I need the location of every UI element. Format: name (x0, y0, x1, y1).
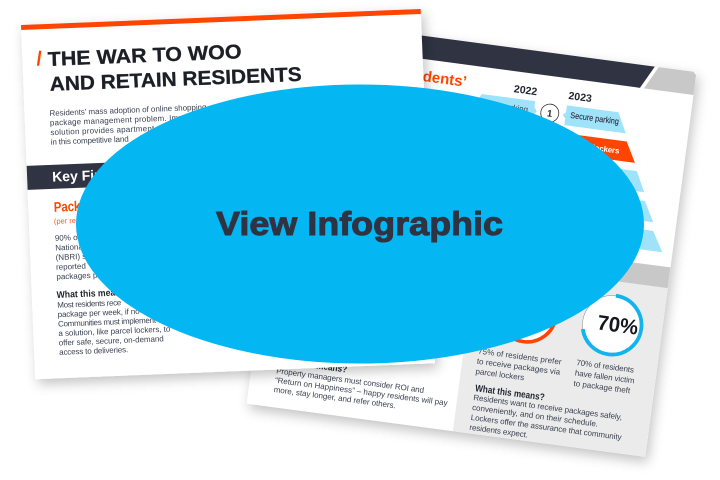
heading: residents: Residents’ (390, 64, 468, 91)
what this means: left: What this means? (277, 355, 348, 376)
package findings text (55, 232, 107, 281)
title slash: / (36, 48, 43, 70)
stat caption: 75%: 75% of residents prefer (478, 347, 562, 367)
row 1, 2022 label: Secure parking (474, 98, 529, 114)
stat caption: 70% (573, 358, 637, 396)
explanation: left: more, stay longer, and refer others. (273, 385, 396, 410)
title: THE WAR TO WOO (47, 41, 242, 71)
rank 1 badge (540, 103, 560, 123)
explanation: right (469, 393, 625, 452)
what this means: right: What this means? (474, 383, 545, 403)
stat caption: 75%: parcel lockers (475, 367, 525, 382)
ranking chart (454, 93, 680, 252)
intro text: package management problem. Imp (50, 113, 184, 128)
explanation: left: Property managers must consider ROI and (276, 366, 425, 395)
what this means: What this means? (56, 287, 131, 301)
stat caption: 75%: to receive packages via (476, 357, 561, 377)
explanation: right: conveniently, and on their schedule. (472, 403, 599, 429)
intro text: in this competitive land (51, 135, 129, 147)
rank 1 badge: 1 (546, 108, 554, 120)
key findings band (27, 150, 427, 190)
row 1, 2023 label: Secure parking (570, 110, 620, 126)
explanation: right: Residents want to receive packages safely, (473, 393, 623, 422)
package findings text: (NBRI) survey (55, 251, 106, 262)
explanation: right: residents expect. (469, 423, 529, 440)
front page sheet (21, 9, 435, 379)
row 4, 2023 (553, 189, 656, 222)
lower grey band (475, 242, 670, 288)
meaning text: Communities must implement (58, 316, 157, 329)
row 2, 2023 (561, 133, 638, 163)
top accent stripe (21, 9, 421, 30)
package findings text: reported (56, 262, 86, 272)
package heading: Package (54, 197, 100, 215)
explanation: left (273, 366, 449, 417)
stat ring: 75% (495, 280, 560, 345)
header corner (644, 66, 696, 95)
explanation: right: Lockers offer the assurance that community (470, 413, 622, 442)
package findings text: packages per (56, 270, 105, 281)
package subheading: (per resident) (54, 215, 99, 226)
label: 2023: 2023 (568, 90, 593, 105)
meaning text: a solution, like parcel lockers, to (58, 325, 171, 338)
view infographic label: View Infographic (216, 206, 503, 243)
stat ring: 70% (579, 292, 645, 358)
intro text: solution provides apartment (50, 124, 155, 137)
stat caption: 70%: to package theft (573, 379, 631, 395)
back page sheet (247, 19, 696, 457)
header band (295, 19, 655, 89)
key findings heading: Key Findings (52, 165, 140, 185)
panel: statistics (453, 263, 668, 457)
meaning text: offer safe, secure, on-demand (59, 334, 164, 348)
row 2, 2023 label: Parcel lockers (567, 140, 620, 156)
title (47, 39, 302, 96)
package findings text: National (55, 242, 85, 253)
blue ellipse (76, 84, 644, 364)
explanation: left: “Return on Happiness” – happy residents will pay (274, 376, 448, 408)
intro text: Residents’ mass adoption of online shopping (49, 103, 207, 118)
row 1, 2022 (469, 93, 538, 121)
row 3, 2023 (557, 161, 647, 192)
meaning text: access to deliveries. (59, 345, 128, 357)
stat caption: 70%: have fallen victim (574, 368, 635, 385)
meaning text: Most residents rece (57, 298, 122, 310)
row 1, 2023 (561, 105, 628, 133)
panel: back page (247, 19, 696, 457)
stat caption: 70%: 70% of residents (576, 358, 634, 375)
row 5, 2023 (549, 217, 665, 252)
label: 2022: 2022 (513, 83, 538, 98)
stat caption: 75% (475, 347, 563, 387)
title: AND RETAIN RESIDENTS (49, 64, 302, 96)
stat ring: 70%: 70% (596, 311, 640, 340)
package findings text: 90% of (55, 233, 81, 243)
intro text (49, 103, 208, 147)
panel: front page (21, 9, 435, 379)
meaning text (57, 296, 172, 357)
meaning text: package per week, if no (57, 307, 140, 319)
